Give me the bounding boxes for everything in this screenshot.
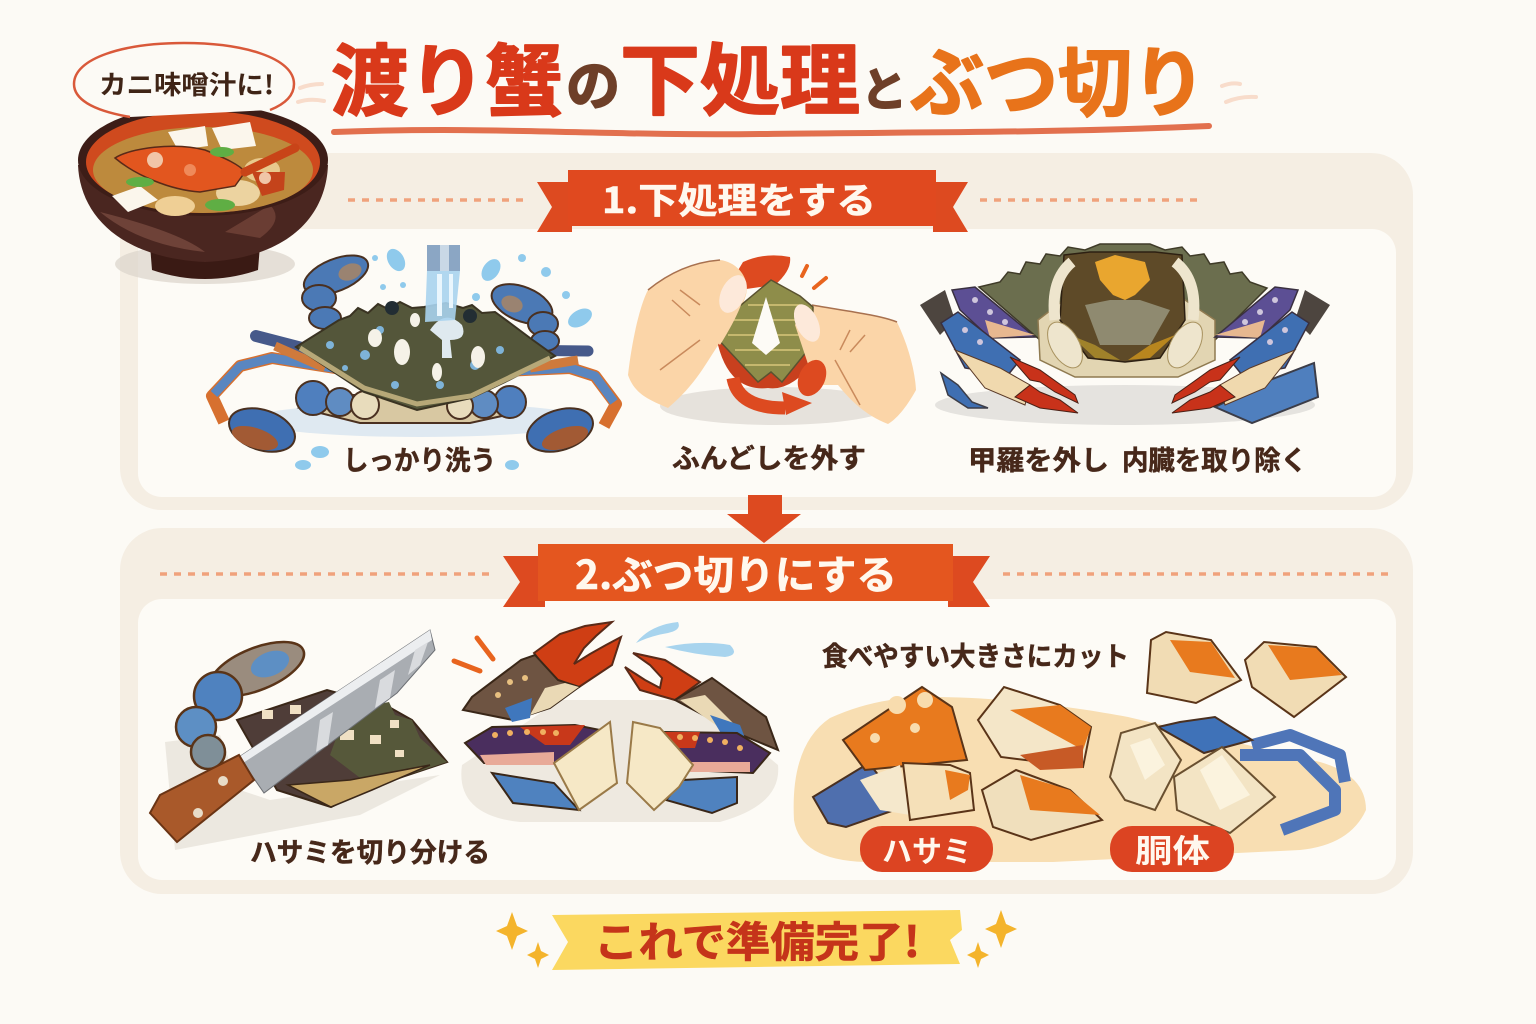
title: ぶつ切り <box>910 22 1206 132</box>
label: claw pill <box>860 826 993 872</box>
icon: water droplets <box>295 246 595 470</box>
label: body pill: 胴体 <box>1135 826 1210 872</box>
arrow: step 1 to step 2 <box>727 495 801 543</box>
dashed rule: step 1 right <box>980 198 1202 202</box>
label: remove shell and guts <box>968 439 1307 478</box>
title accent strokes <box>298 83 1256 102</box>
platter: beige backdrop <box>794 697 1366 862</box>
icon: miso soup bowl <box>78 104 328 284</box>
label: separate claws: ハサミを切り分ける <box>250 831 490 870</box>
icon: sparkles left <box>496 912 549 968</box>
title: 下処理 <box>620 19 860 131</box>
illustration: crab with shell off <box>920 244 1330 425</box>
title <box>331 19 1206 132</box>
label: claw pill: ハサミ <box>882 827 972 871</box>
illustration: hands removing apron <box>628 255 916 425</box>
dashed rule: step 1 left <box>348 198 524 202</box>
title underline <box>334 126 1209 134</box>
label: remove shell and guts: 甲羅を外し <box>968 439 1109 478</box>
label: remove shell and guts: 内臓を取り除く <box>1122 439 1307 478</box>
icon: running water <box>425 245 460 322</box>
banner: step 2 heading <box>503 543 990 607</box>
banner: step 1 heading: 1.下処理をする <box>602 172 876 224</box>
dashed rule: step 2 right <box>1003 572 1388 576</box>
illustration: body chunks <box>1110 717 1345 833</box>
illustration: knife cutting crab <box>150 630 447 850</box>
icon: sparkles right <box>967 910 1017 968</box>
panel: step 1 <box>120 153 1413 510</box>
illustration: claw chunks <box>813 632 1346 840</box>
label: remove apron: ふんどしを外す <box>672 437 866 476</box>
label: body pill <box>1110 826 1234 872</box>
illustration: separated claws <box>461 622 778 822</box>
banner: ready: これで準備完了! <box>594 909 920 970</box>
icon: motion swooshes <box>636 622 734 657</box>
callout: speech bubble: カニ味噌汁に! <box>99 65 274 102</box>
panel: step 2 <box>120 528 1413 894</box>
label: cut to size: 食べやすい大きさにカット <box>822 635 1129 674</box>
label: wash: しっかり洗う <box>343 439 496 478</box>
title: 渡り蟹 <box>331 20 563 132</box>
icon: impact ticks <box>454 638 493 671</box>
title: と <box>861 54 907 120</box>
banner: step 2 heading: 2.ぶつ切りにする <box>575 543 897 601</box>
title: の <box>566 42 620 121</box>
dashed rule: step 2 left <box>160 572 490 576</box>
banner: step 1 heading <box>537 170 968 232</box>
callout: speech bubble <box>74 43 294 117</box>
illustration: crab being washed <box>212 247 616 460</box>
